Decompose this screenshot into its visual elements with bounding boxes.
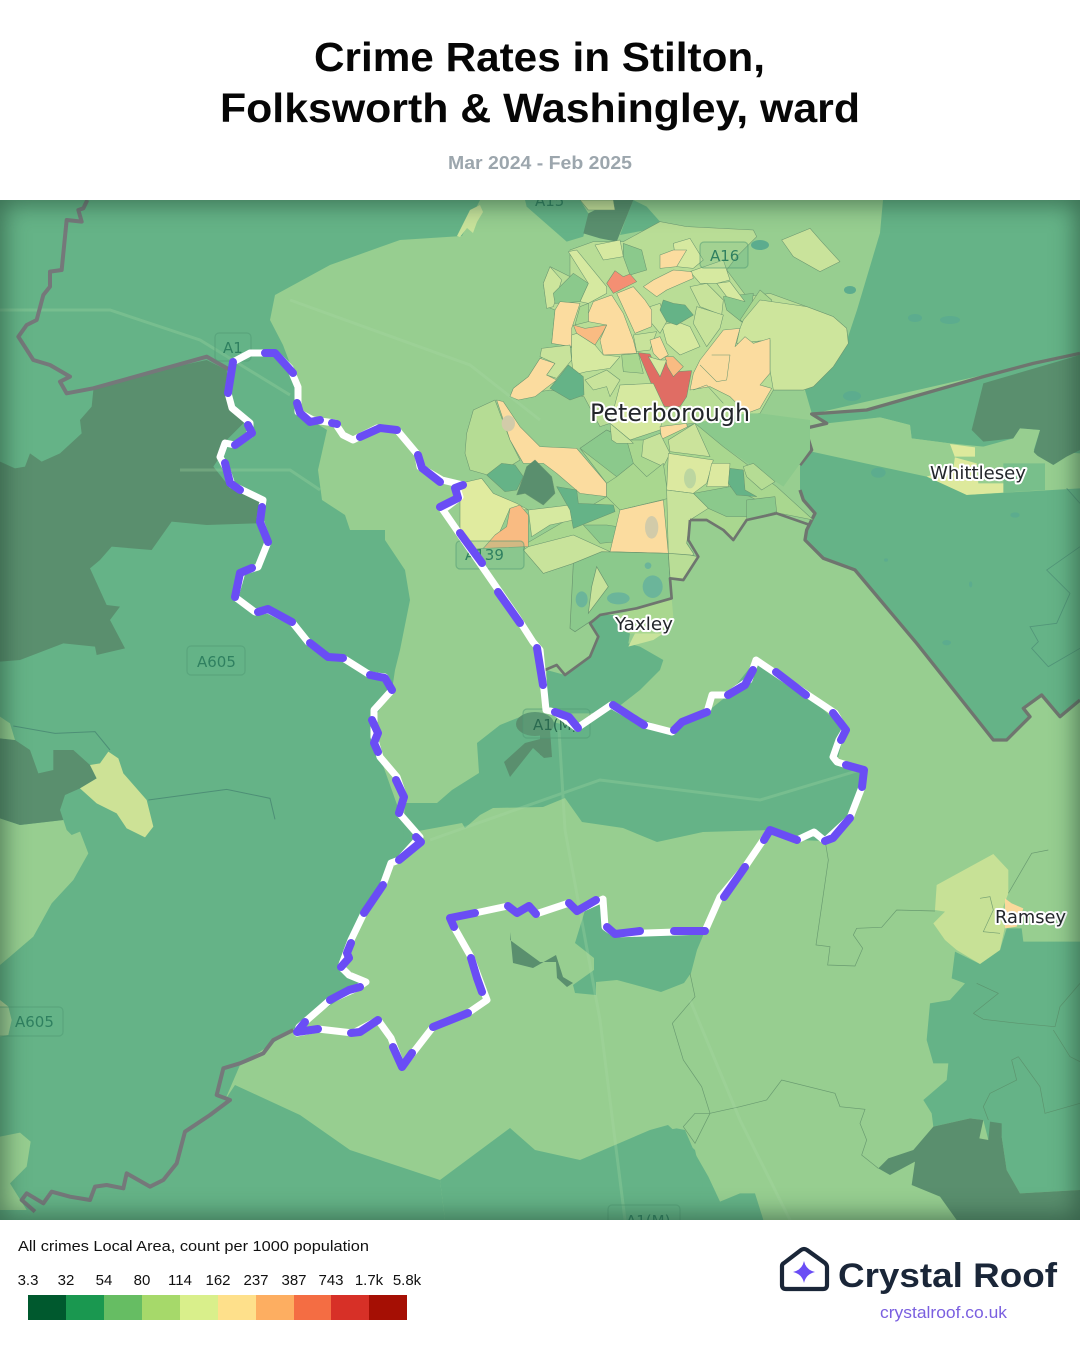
- road labels: [0, 192, 748, 1233]
- east water: [871, 468, 1020, 645]
- legend ticks: 32: [58, 1272, 74, 1289]
- west medium crime region: [0, 200, 480, 1220]
- east regions: [800, 353, 1080, 740]
- green wards: [550, 365, 584, 400]
- title: [220, 34, 860, 131]
- south-west patches: [0, 717, 275, 1210]
- legend ticks: 387: [281, 1272, 307, 1289]
- legend colour scale: [28, 1295, 407, 1320]
- south of Peterborough and Yaxley: [545, 520, 698, 713]
- legend ticks: 54: [96, 1272, 112, 1289]
- icon: house with sparkle: [782, 1249, 827, 1289]
- county boundary north-west: [18, 200, 230, 393]
- Peterborough urban wards: [460, 200, 848, 578]
- ward boundary: [220, 353, 864, 1067]
- peach ward south: [610, 500, 668, 553]
- peach wards east: [690, 328, 772, 413]
- red-orange ward north: [607, 271, 637, 293]
- southern urban base: [523, 423, 813, 578]
- peach central wards: [588, 295, 637, 355]
- south ward dark patch: [510, 932, 573, 987]
- header: [220, 34, 860, 173]
- date range subtitle: Mar 2024 - Feb 2025: [448, 153, 632, 173]
- legend ticks: 743: [318, 1272, 344, 1289]
- light area beside county line: [237, 1030, 300, 1110]
- faint roads: [0, 300, 860, 1220]
- orange ward south-west: [483, 505, 528, 548]
- top light patch: [457, 205, 483, 237]
- road labels: A605: [15, 1013, 54, 1031]
- legend ticks: 5.8k: [393, 1272, 422, 1289]
- footer: [18, 1238, 1058, 1322]
- south-west bend: [465, 400, 520, 477]
- place labels: Ramsey: [995, 907, 1066, 928]
- road labels: A16: [710, 247, 739, 265]
- logo: [782, 1249, 1058, 1322]
- south-west pale ward: [460, 478, 528, 550]
- legend ticks: 3.3: [18, 1272, 38, 1289]
- map panel: [0, 200, 1080, 1220]
- south ward medium area: [573, 900, 705, 995]
- website url: crystalroof.co.uk: [880, 1303, 1008, 1322]
- title: Crime Rates in Stilton,: [314, 34, 765, 80]
- dark west region: [0, 360, 263, 662]
- central strip of medium crime: [403, 660, 864, 842]
- county boundary east: [800, 353, 1080, 740]
- orange ward: [573, 325, 607, 345]
- central red ward: [638, 353, 692, 407]
- legend ticks: 80: [134, 1272, 150, 1289]
- southern medium patches: [440, 1125, 703, 1220]
- legend ticks: 162: [205, 1272, 231, 1289]
- place labels: Peterborough: [590, 399, 750, 427]
- wordmark: Crystal Roof: [838, 1257, 1058, 1295]
- title: Folksworth & Washingley, ward: [220, 85, 860, 131]
- purple ward dashes: [225, 353, 864, 1067]
- road labels: A1: [223, 339, 243, 357]
- large pale NE ward: [737, 300, 848, 390]
- road labels: A605: [197, 653, 236, 671]
- dark patch near A1(M): [504, 712, 554, 777]
- road labels: A139: [465, 546, 504, 564]
- county boundary south-west: [22, 1030, 293, 1212]
- place labels: Yaxley: [614, 614, 673, 635]
- northern urban base: [510, 222, 848, 427]
- legend ticks: 114: [168, 1272, 192, 1289]
- medium wards south of city: [570, 552, 672, 632]
- county boundary south of city: [690, 513, 810, 540]
- place labels: Whittlesey: [930, 463, 1026, 484]
- south-east regions: [640, 840, 1080, 1220]
- south-east green band: [693, 413, 810, 487]
- northern green wards: [525, 200, 588, 242]
- north-east water: [751, 240, 960, 401]
- legend: [18, 1238, 422, 1320]
- north-east medium region: [805, 200, 1080, 414]
- legend ticks: 1.7k: [355, 1272, 384, 1289]
- county boundary: [545, 520, 698, 675]
- legend ticks: 237: [243, 1272, 269, 1289]
- water south of city: [576, 562, 663, 607]
- legend ticks: [18, 1272, 422, 1289]
- legend title: All crimes Local Area, count per 1000 population: [18, 1238, 369, 1255]
- road labels: A1(M): [533, 716, 577, 734]
- place labels: [590, 399, 1066, 928]
- white ward outline: [220, 353, 864, 1067]
